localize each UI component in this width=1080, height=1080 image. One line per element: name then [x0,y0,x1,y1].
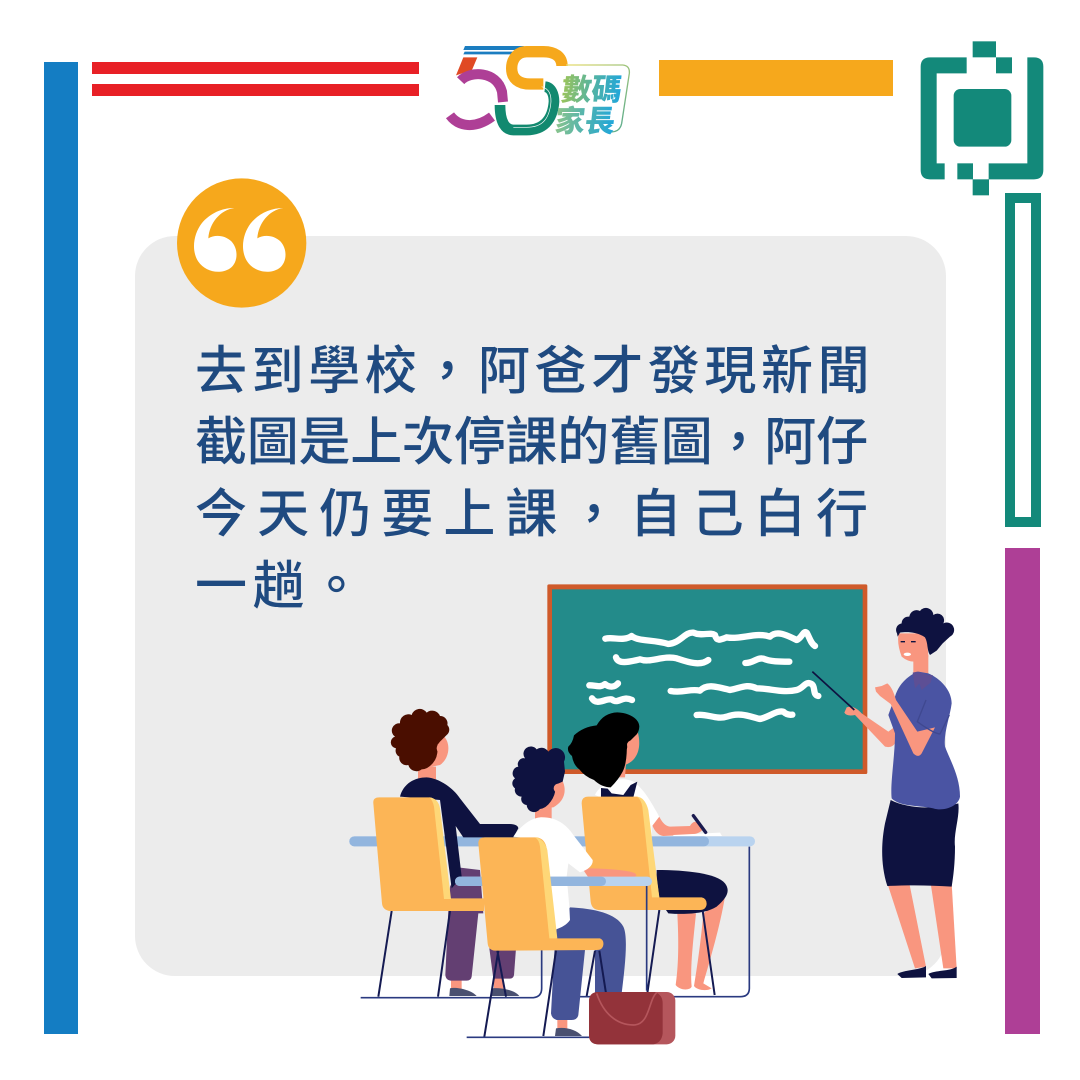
text block: quote: 一趟。 [195,558,368,616]
text block: quote: 截圖是上次停課的舊圖，阿仔 [195,414,868,472]
bag [589,992,675,1044]
logo: 55 digital parents: 數碼 [560,74,623,107]
bars: red top [92,62,419,96]
icon: quotation mark badge [177,178,306,308]
bar: blue left [44,62,78,1034]
panel: grey card [135,236,946,976]
frame: green outlined tall bar [1005,193,1041,527]
logo: 55 digital parents: 家長 [553,104,617,138]
illustration: students at desks [349,709,755,1044]
bar: purple right [1005,548,1040,1034]
text block: quote: 今天仍要上課，自己白行 [195,486,878,544]
chalkboard [547,584,867,774]
bar: orange top [659,60,893,96]
chair: left boy [373,797,484,997]
illustration: teacher with pointer [812,608,960,978]
student: boy left [391,709,519,996]
icon: green pixel bracket [921,41,1043,195]
front desk [455,877,652,991]
chair: front boy [467,837,606,1037]
student: girl [568,712,728,990]
chair: girl [582,797,715,995]
student: boy front [512,746,636,1036]
back desk [349,836,755,998]
text block: quote: 去到學校，阿爸才發現新聞 [195,343,874,401]
logo: 55 digital parents [450,46,629,138]
